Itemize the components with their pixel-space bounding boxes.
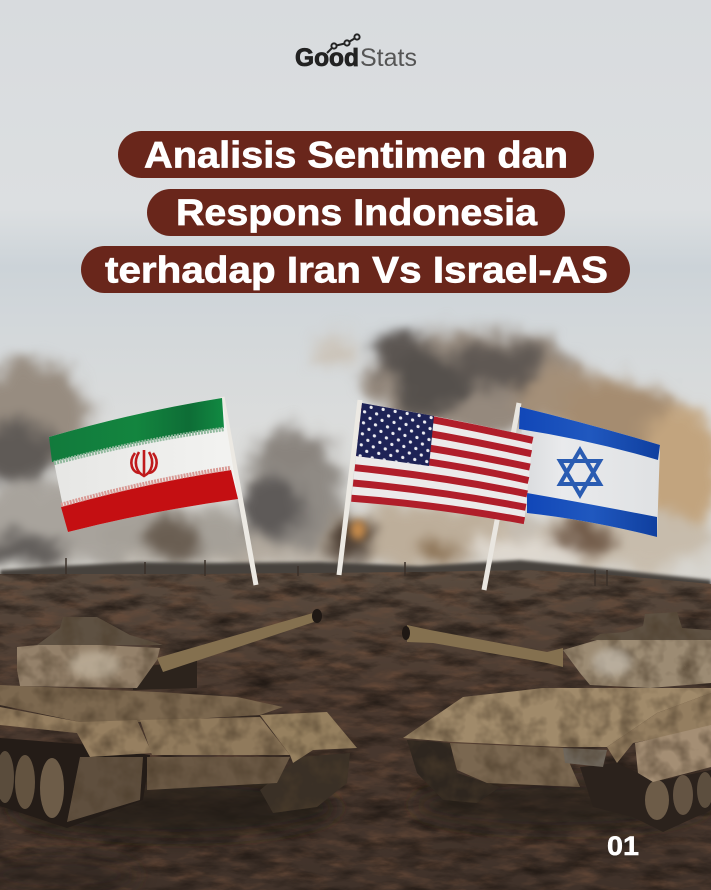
right tank cupola bbox=[590, 612, 711, 640]
flag: USA bbox=[339, 400, 533, 575]
left tank barrel bbox=[157, 613, 320, 672]
left tank hull and fenders bbox=[0, 685, 357, 790]
logo wordmark: Stats: Stats bbox=[360, 44, 417, 72]
left tank far track bbox=[260, 753, 350, 813]
title: line 3 pill: terhadap Iran Vs Israel-AS bbox=[105, 250, 608, 290]
red stripes bbox=[351, 407, 533, 521]
left tank near track and wheels bbox=[0, 738, 150, 828]
right tank front track bbox=[407, 740, 500, 803]
tank: left bbox=[0, 609, 357, 828]
title: line 2 pill: Respons Indonesia bbox=[176, 192, 537, 233]
left tank turret highlight bbox=[69, 651, 121, 679]
tank: right bbox=[402, 612, 711, 832]
explosion glow bbox=[350, 520, 366, 540]
logo wordmark: Good: Good bbox=[295, 44, 359, 72]
flag: Iran bbox=[49, 397, 256, 585]
right tank turret bbox=[563, 635, 711, 688]
title: line 1 pill: Analisis Sentimen dan bbox=[144, 134, 568, 176]
flag pole: Israel bbox=[484, 403, 519, 590]
right tank barrel bbox=[407, 625, 563, 667]
canton with stars bbox=[356, 403, 434, 466]
left tank cupola bbox=[37, 617, 163, 645]
background: smoke clouds bbox=[0, 328, 711, 570]
background: scorched ground bbox=[0, 558, 711, 890]
right tank turret highlight bbox=[592, 648, 632, 676]
flag pole: Iran bbox=[222, 397, 256, 585]
logo icon: line chart bbox=[327, 34, 360, 53]
distant mounds bbox=[0, 560, 711, 590]
logo: GoodStats bbox=[295, 34, 417, 72]
icon: Iran emblem bbox=[131, 450, 157, 476]
left tank turret ring shadow bbox=[133, 660, 197, 690]
flag pole: USA bbox=[339, 400, 360, 575]
left tank turret bbox=[17, 643, 160, 688]
background: sky bbox=[0, 0, 711, 580]
icon: star of David bbox=[560, 450, 600, 495]
right tank hull bbox=[403, 688, 711, 787]
flag: Israel bbox=[484, 403, 660, 590]
right tank rear track and wheels bbox=[580, 763, 711, 832]
page number: 01 bbox=[607, 831, 639, 861]
